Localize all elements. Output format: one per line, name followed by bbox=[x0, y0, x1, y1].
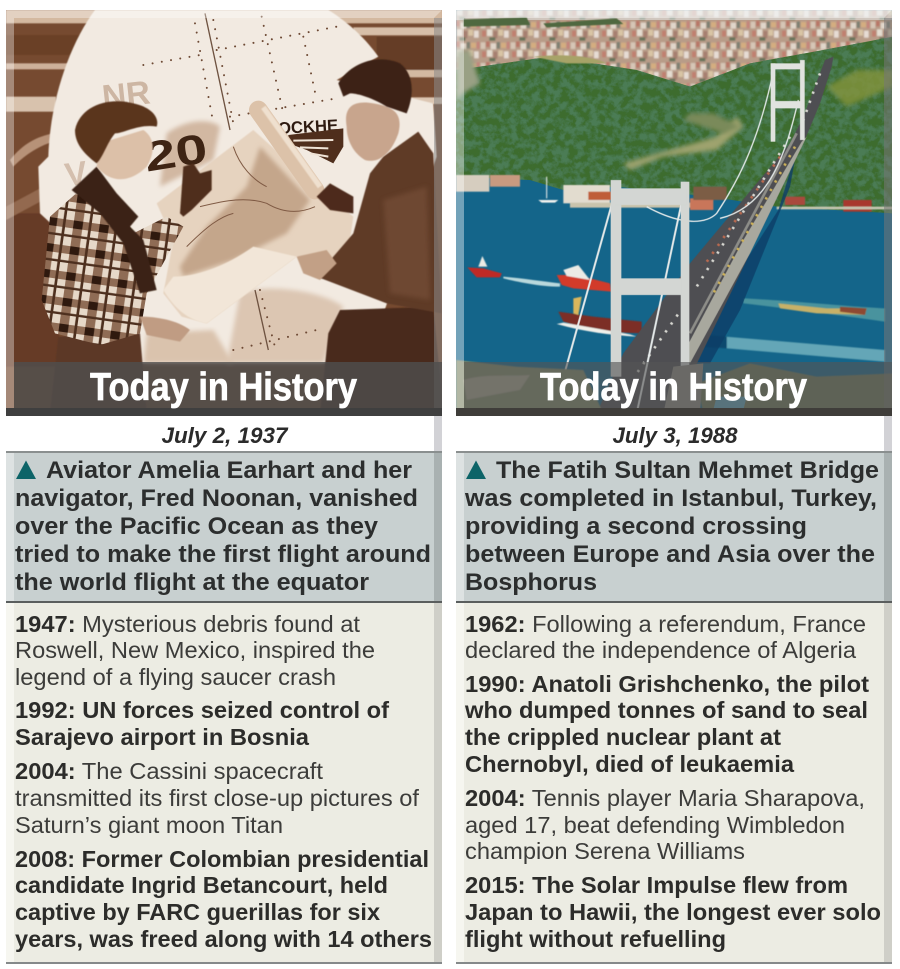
headline text: Aviator Amelia Earhart and her bbox=[46, 457, 412, 484]
event: 1947: legend of a flying saucer crash bbox=[15, 664, 336, 690]
event: 1992 bbox=[15, 697, 389, 750]
panel: headline event bbox=[456, 453, 892, 603]
Earhart bbox=[56, 332, 144, 364]
event: 2008 bbox=[15, 846, 432, 952]
title: Today in History bbox=[90, 366, 357, 409]
bridge cables bbox=[553, 72, 798, 413]
event: 1990: 1990: Anatoli Grishchenko, the pilot bbox=[465, 671, 869, 697]
bevel edges bbox=[6, 10, 442, 416]
panel: right column bbox=[456, 10, 893, 964]
event: 1962 bbox=[465, 611, 866, 663]
photo: Amelia Earhart and Fred Noonan with a map: OCKHE bbox=[278, 116, 339, 138]
headline text: tried to make the first flight around bbox=[15, 541, 431, 568]
shadow of bridge bbox=[698, 162, 794, 363]
photo: Fatih Sultan Mehmet Bridge, Istanbul bbox=[456, 10, 893, 416]
panel: other events bbox=[456, 603, 892, 964]
icon: teal triangle bbox=[466, 460, 486, 479]
headline text: providing a second crossing bbox=[465, 513, 807, 540]
photo: Amelia Earhart and Fred Noonan with a map bbox=[6, 10, 443, 416]
city bbox=[456, 10, 893, 87]
far tower bbox=[771, 60, 805, 142]
headline text: Bosphorus bbox=[465, 569, 597, 596]
headline text bbox=[15, 457, 431, 596]
near tower bbox=[611, 180, 689, 378]
map roll bbox=[258, 110, 315, 190]
event: 2008: captive by FARC guerillas for six bbox=[15, 899, 380, 925]
event: 2015: flight without refuelling bbox=[465, 926, 726, 952]
photo: Amelia Earhart and Fred Noonan with a map: V bbox=[63, 155, 90, 195]
headline text: The Fatih Sultan Mehmet Bridge bbox=[496, 457, 879, 484]
headline text: between Europe and Asia over the bbox=[465, 541, 875, 568]
traffic bbox=[637, 73, 820, 373]
headline text: was completed in Istanbul, Turkey, bbox=[464, 485, 877, 512]
event: 1992: Sarajevo airport in Bosnia bbox=[15, 724, 310, 750]
event: 1990: the crippled nuclear plant at bbox=[465, 724, 781, 750]
event: 1990: Chernobyl, died of leukaemia bbox=[465, 751, 795, 777]
panel: other events bbox=[6, 603, 442, 964]
fuselage bbox=[38, 10, 437, 363]
event: 2004: transmitted its first close-up pictures of bbox=[15, 785, 419, 811]
event: 2004: aged 17, beat defending Wimbledon bbox=[465, 812, 845, 838]
event: 2008: candidate Ingrid Betancourt, held bbox=[15, 872, 388, 898]
event: 2008: years, was freed along with 14 others bbox=[15, 926, 432, 952]
event: 2004 bbox=[15, 758, 419, 838]
map bbox=[157, 130, 353, 323]
title band bbox=[456, 362, 892, 416]
rivets bbox=[143, 17, 337, 353]
event: 2004: 2004: The Cassini spacecraft bbox=[15, 758, 323, 784]
event: 1947 bbox=[15, 611, 375, 690]
panel: left column bbox=[6, 10, 443, 964]
event: 2004: champion Serena Williams bbox=[465, 838, 745, 864]
ships bbox=[467, 256, 885, 362]
event: 1947: Roswell, New Mexico, inspired the bbox=[15, 637, 375, 663]
bevel edges bbox=[456, 10, 892, 416]
title: Today in History bbox=[540, 366, 807, 409]
event: 2004: Saturn’s giant moon Titan bbox=[15, 812, 283, 838]
icon: teal triangle bbox=[16, 460, 36, 479]
event: 2015: 2015: The Solar Impulse flew from bbox=[465, 872, 848, 898]
event: 1992: 1992: UN forces seized control of bbox=[15, 697, 389, 723]
far shore buildings bbox=[456, 175, 893, 212]
event: 1962: declared the independence of Algeria bbox=[465, 637, 857, 663]
Noonan bbox=[322, 307, 438, 408]
headline text: navigator, Fred Noonan, vanished bbox=[15, 485, 418, 512]
hills bbox=[456, 37, 893, 213]
event: 1962: 1962: Following a referendum, France bbox=[465, 611, 866, 637]
headline text: over the Pacific Ocean as they bbox=[15, 513, 379, 540]
bridge deck bbox=[597, 57, 833, 413]
hangar background beams bbox=[6, 10, 443, 367]
headline text bbox=[464, 457, 879, 596]
date strip bbox=[6, 416, 442, 453]
panel: headline event bbox=[6, 453, 442, 603]
event: 1990 bbox=[464, 671, 869, 777]
event: 2015 bbox=[465, 872, 881, 952]
title band bbox=[6, 362, 442, 416]
date strip bbox=[456, 416, 892, 453]
event: 1990: who dumped tonnes of sand to seal bbox=[464, 697, 868, 723]
foreground land bbox=[456, 360, 601, 408]
event: 2004: 2004: Tennis player Maria Sharapova, bbox=[465, 785, 865, 811]
headline text: the world flight at the equator bbox=[15, 569, 369, 596]
date: July 3, 1988 bbox=[612, 423, 738, 448]
photo: Amelia Earhart and Fred Noonan with a map: 20 bbox=[141, 124, 211, 181]
date: July 2, 1937 bbox=[162, 423, 289, 448]
event: 2004 bbox=[465, 785, 865, 864]
event: 2008: 2008: Former Colombian presidential bbox=[15, 846, 429, 872]
aircraft markings: NR bbox=[100, 74, 152, 116]
event: 2015: Japan to Hawii, the longest ever solo bbox=[465, 899, 881, 925]
event: 1947: 1947: Mysterious debris found at bbox=[15, 611, 360, 637]
